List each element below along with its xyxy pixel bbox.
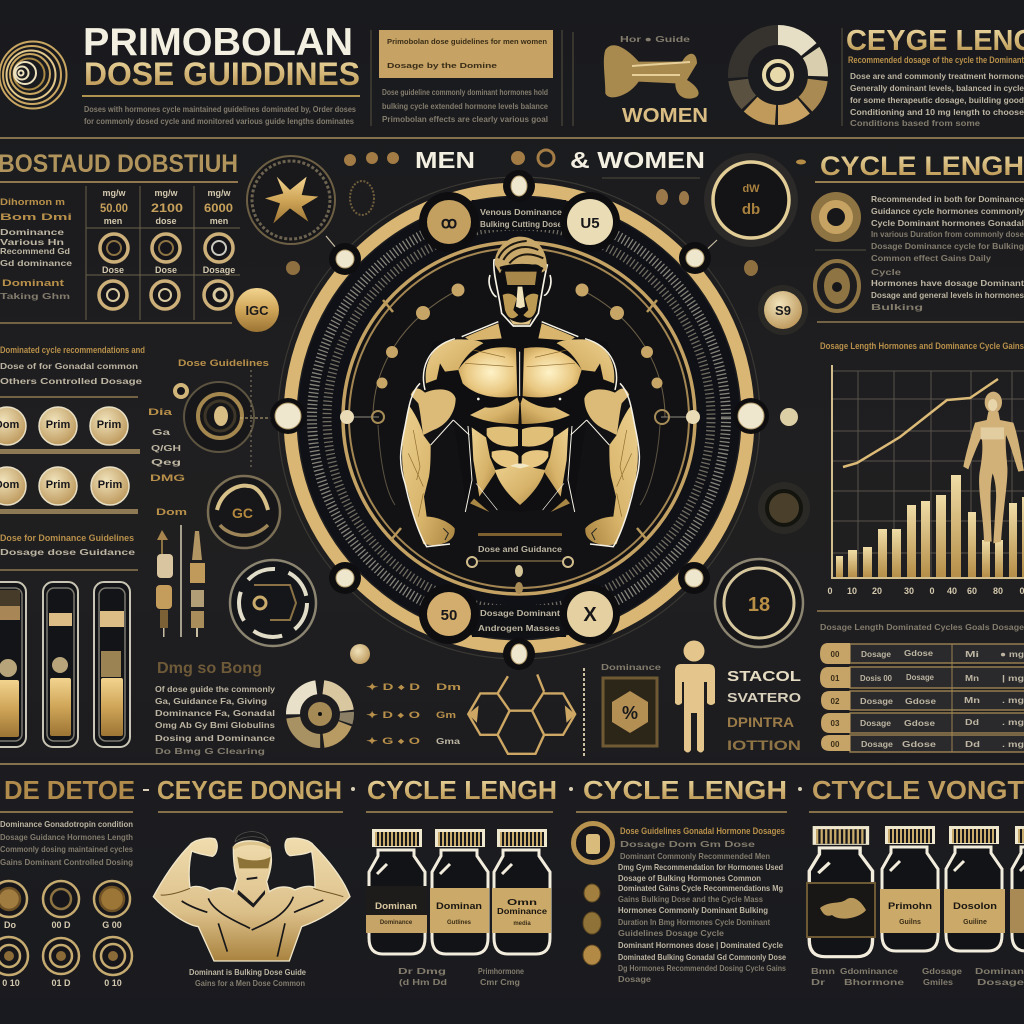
text block: cycle notes 1: Recommended in both for Dominance — [871, 194, 1024, 204]
figure: woman — [963, 392, 1024, 543]
heading 4: CYCLE LENGH — [583, 775, 787, 805]
table values: Dose — [102, 265, 124, 275]
table row labels: 00 — [831, 740, 840, 749]
text block: notes: Dosage — [618, 974, 651, 984]
icon: right dot — [780, 408, 798, 426]
pills row 1: Prim — [97, 419, 121, 431]
chart: bars and trend — [827, 365, 1024, 596]
bottle captions — [398, 966, 524, 987]
chart axis labels: 10 — [847, 586, 857, 596]
table values — [100, 188, 235, 275]
table row labels: 00 — [831, 650, 840, 659]
bottle captions: Dr Dmg — [398, 966, 446, 976]
text block: bottom left — [0, 819, 133, 867]
chart axis labels: 20 — [872, 586, 882, 596]
callout: gold box: Dosage by the Domine — [387, 61, 497, 70]
icon: bone shape with women label: WOMEN — [622, 105, 708, 127]
bottle captions: Dosage — [977, 977, 1024, 987]
chart axis labels: 40 — [947, 586, 957, 596]
subtitle text: for commonly dosed cycle and monitored various guide lengths dominates — [84, 116, 354, 126]
text block: mid-left column: Qeg — [151, 457, 181, 467]
table values: Dose — [155, 265, 177, 275]
text block: notes: Dosage Dom Gm Dose — [620, 839, 755, 849]
heading: dose duration: BOSTAUD DOBSTIUH — [0, 150, 238, 178]
label: men: MEN — [415, 147, 475, 173]
text block: dose notes: Ga, Guidance Fa, Giving — [155, 696, 267, 706]
table row text: . mg — [1002, 739, 1024, 749]
text block: dose notes — [155, 684, 275, 756]
text block: table intro: Recommend Gd — [0, 246, 70, 256]
table row text: ● mg — [1000, 649, 1024, 659]
outer gold ring — [290, 189, 748, 647]
header panel — [0, 21, 1024, 128]
text block: side label: STACOL — [727, 668, 801, 685]
text block: pills heading — [0, 345, 145, 386]
panel: lower middle icons — [293, 408, 810, 757]
chart axis labels: 0 — [827, 586, 833, 596]
bottle 1: Dominance — [380, 920, 413, 926]
icon: dosing pins — [156, 525, 205, 637]
text block: bottom left: Dosage Guidance Hormones Length — [0, 832, 133, 842]
table values: 2100 — [151, 201, 183, 215]
table: dose rows — [820, 643, 1024, 752]
band caption bottom: Androgen Masses — [478, 623, 560, 633]
icon: framed badge: Dominance — [601, 662, 661, 672]
bottle captions: Gdominance — [840, 966, 898, 976]
text block: mid-left heading: Dose Guidelines — [178, 358, 269, 368]
text block: side label: SVATERO — [727, 690, 801, 705]
text block: table intro: Gd dominance — [0, 258, 72, 268]
text block: cycle notes — [848, 55, 1024, 128]
icon labels: 0 10 — [104, 978, 122, 988]
pills row 1 — [0, 407, 128, 445]
text block: intro: Dose guideline commonly dominant hormones hold — [382, 87, 548, 97]
text block: dose notes: Dominance Fa, Gonadal — [155, 708, 275, 718]
icon: framed badge: % — [622, 703, 638, 723]
text block: mid-left column: Q/GH — [151, 443, 181, 453]
icon labels: 0 10 — [2, 978, 20, 988]
ring nodes: large numbered: ꝏ — [441, 215, 457, 232]
callout: gold box — [379, 30, 553, 78]
band caption bottom — [472, 605, 566, 637]
icon labels: Do — [4, 920, 16, 930]
heading separators — [143, 787, 802, 791]
inner gold rings — [343, 242, 695, 594]
table values: dose — [155, 216, 177, 226]
dashed divider — [583, 668, 585, 757]
title: PRIMOBOLAN — [83, 21, 353, 64]
heading 2: CEYGE DONGH — [157, 775, 342, 805]
concentric icons — [0, 881, 132, 975]
text block: mid-left column: Dom — [156, 507, 187, 517]
table row text: . mg — [1002, 695, 1024, 705]
icon: right small badge: S9 — [775, 303, 791, 318]
icon: small badge IGC — [235, 288, 279, 332]
icon: ring with hexagon — [230, 560, 316, 646]
icon: gold spiral — [0, 42, 66, 108]
table row text: Dosage — [906, 672, 934, 682]
text block: notes: Dg Hormones Recommended Dosing Cycle Gains — [618, 963, 786, 973]
text block: notes: Hormones Commonly Dominant Bulking — [618, 905, 768, 915]
table row text — [860, 648, 1024, 749]
icon: crest badge: db — [742, 201, 760, 218]
text block: notes: Dmg Gym Recommendation for Hormones Used — [618, 862, 783, 872]
text block: dose notes: Dosing and Dominance — [155, 733, 275, 743]
text block: bottom left: Gains Dominant Controlled Dosing — [0, 857, 133, 867]
text block: mid-left column: Dia — [148, 407, 174, 417]
pills row 2: Prim — [98, 479, 122, 491]
bottle captions: Gmiles — [923, 977, 953, 987]
bottle captions: Bmn — [811, 966, 835, 976]
text block: table intro: Dominance — [0, 227, 64, 237]
icon: gold ring — [811, 192, 861, 242]
label: and women: & WOMEN — [570, 147, 705, 173]
chart axis labels: 80 — [993, 586, 1003, 596]
panel: mid-left icons — [148, 358, 316, 756]
heading 5: CTYCLE VONGT — [812, 775, 1024, 805]
text block: dose notes: Do Bmg G Clearing — [155, 746, 265, 756]
table row text: Dosage — [861, 649, 891, 659]
text block: cycle notes 1: Common effect Gains Daily — [871, 253, 991, 263]
text block: notes: Dose Guidelines Gonadal Hormone Dosages — [620, 826, 785, 836]
hatched band — [298, 197, 740, 639]
table row text: . mg — [1002, 717, 1024, 727]
icon labels: G 00 — [102, 920, 122, 930]
bottle 3 — [492, 829, 551, 954]
text block: cycle notes 2: Hormones have dosage Dominant — [871, 278, 1024, 288]
text block: table intro: Various Hn — [0, 237, 64, 247]
table row text: Dosage — [860, 696, 893, 706]
table values: men — [104, 216, 122, 226]
table grid — [86, 186, 240, 320]
heading 1: DE DETOE — [4, 775, 135, 805]
panel: right cycle length — [796, 151, 1024, 752]
text block: cycle notes 1: Cycle Dominant hormones Gonadal — [871, 218, 1024, 228]
callout: gold box: Primobolan dose guidelines for men women — [387, 37, 547, 46]
vial 3 — [94, 582, 130, 747]
text block: glyph columns: ✦ D ♦ O — [366, 710, 420, 720]
bottle 6: Dosolon — [953, 901, 997, 911]
icon: right ring: 18 — [748, 594, 770, 616]
icon: star badge — [247, 156, 342, 255]
inner orbit with dots — [340, 284, 700, 505]
title — [82, 21, 360, 96]
heading: cycle length: CYCLE LENGH — [820, 151, 1024, 181]
table row text: | mg — [1002, 673, 1024, 683]
chart axis labels: 0 — [929, 586, 935, 596]
icon: small badge IGC: IGC — [245, 303, 269, 318]
table row text: Gdose — [904, 648, 933, 658]
bottle 5: Guilns — [899, 919, 921, 926]
chart trend line — [843, 379, 998, 467]
panel: left dose table — [0, 150, 240, 323]
heading 3: CYCLE LENGH — [367, 775, 557, 805]
heading: dose blurred: Dmg so Bong — [157, 660, 262, 677]
band caption top — [472, 200, 566, 230]
bottle 2: Gutlines — [447, 920, 472, 926]
text block: cycle notes: for some therapeutic dosage, building good — [850, 95, 1024, 105]
ring nodes: large numbered: 50 — [441, 607, 457, 624]
table rows — [850, 644, 1024, 752]
bottle 5 — [880, 826, 940, 951]
table row text: Gdose — [904, 718, 935, 728]
icon: target ring — [184, 370, 272, 470]
caption under figure: Dose and Guidance — [478, 544, 562, 554]
icon: right small ring — [758, 482, 810, 534]
text block: notes: Dominant Hormones dose | Dominated Cycle — [618, 940, 783, 950]
panel: bottom notes — [574, 824, 786, 984]
text block: pills heading: Others Controlled Dosage — [0, 376, 142, 386]
icon: small donut — [175, 385, 187, 397]
text block: mid-left column: DMG — [150, 473, 185, 483]
chart axis labels — [827, 586, 1024, 596]
icons: medallions — [583, 884, 601, 965]
text block: cycle notes 1: Dosage Dominance cycle for Bulking — [871, 241, 1024, 251]
bottle 3: Dominance — [497, 907, 548, 916]
ring nodes: large numbered: X — [583, 604, 597, 626]
section dividers — [0, 138, 1024, 764]
table row text: Mn — [964, 695, 980, 705]
table values: men — [210, 216, 228, 226]
text block: table intro: Dominant — [2, 278, 64, 288]
icon: ring with gold arcs: GC — [232, 505, 253, 521]
text block: side label: DPINTRA — [727, 714, 794, 730]
text block: notes: Dosage of Bulking Hormones Common — [618, 873, 761, 883]
bottle 7 — [1010, 826, 1024, 951]
bottle captions: Bhormone — [844, 977, 904, 987]
icon labels: 00 D — [51, 920, 71, 930]
text block: table heading: Dosage Length Dominated Cycles Goals Dosage — [820, 622, 1024, 632]
text block: notes: Duration In Bmg Hormones Cycle Dominant — [618, 917, 770, 927]
table row labels: 02 — [831, 697, 840, 706]
ring nodes: large numbered: U5 — [580, 215, 600, 232]
text block: notes — [618, 826, 786, 984]
bottle 2 — [430, 829, 489, 954]
subtitle text — [84, 104, 356, 126]
icon: bone shape with women label — [604, 34, 708, 127]
text block: cycle notes: Dose are and commonly treatment hormone — [850, 71, 1024, 81]
text block: table intro — [0, 197, 72, 301]
text block: mid-left column — [148, 407, 187, 517]
table row text: Mn — [965, 673, 979, 683]
icon labels: 01 D — [51, 978, 71, 988]
text block: under pills — [0, 533, 135, 557]
caption: flexing man — [189, 967, 306, 988]
emblem: top heading row — [235, 147, 808, 335]
vial 2 — [43, 582, 78, 747]
subtitle text: Doses with hormones cycle maintained guidelines dominated by, Order doses — [84, 104, 356, 114]
bottle captions: Dominan — [975, 966, 1024, 976]
band caption top: Venous Dominance — [480, 207, 562, 217]
text block: glyph columns: ✦ G ♦ O — [366, 736, 420, 746]
text block: notes: Guidelines Dosage Cycle — [618, 928, 724, 938]
table row labels: 01 — [831, 674, 840, 683]
table row text: Dd — [965, 739, 980, 749]
ring nodes: small — [270, 170, 769, 670]
chart axes — [832, 365, 1024, 578]
panel: left pills — [0, 345, 145, 570]
icon: small coin — [350, 644, 370, 664]
bottle captions: Primhormone — [478, 966, 524, 976]
text block: cycle notes 2: Bulking — [871, 302, 923, 312]
icon: oval badge — [815, 261, 859, 311]
table row text: Gdose — [905, 696, 936, 706]
table row labels: 03 — [831, 719, 840, 728]
vial 1 — [0, 582, 26, 747]
icon: framed badge — [601, 662, 661, 746]
text block: side label — [727, 668, 801, 753]
text block: glyph columns — [366, 682, 461, 746]
text block: cycle notes: Conditions based from some — [850, 118, 980, 128]
icon: right ring — [715, 559, 803, 647]
figure: muscular man — [401, 237, 639, 547]
bottle 5: Primohn — [888, 901, 932, 911]
bottles group right — [807, 826, 1024, 987]
bottle 1 — [366, 829, 427, 954]
text block: intro: bulking cycle extended hormone levels balance — [382, 101, 548, 111]
text block: side label: IOTTION — [727, 737, 801, 753]
chart grid — [832, 371, 1024, 578]
icon: gold ring with cylinder — [574, 824, 612, 862]
bottle captions: Dr — [811, 977, 826, 987]
icon: small hive — [350, 181, 374, 215]
table values: 6000 — [204, 201, 233, 215]
bottle 4 — [807, 826, 875, 957]
icon: marks beside crest — [656, 189, 689, 205]
chart axis labels: 30 — [904, 586, 914, 596]
dose icons row 2 — [99, 281, 232, 309]
chart bars — [836, 475, 1024, 577]
text block: glyph columns: Gma — [436, 736, 460, 746]
icon: tiny marks before men — [344, 152, 399, 166]
text block: notes: Dominated Gains Cycle Recommendations Mg — [618, 883, 783, 893]
text block: cycle notes 1: Guidance cycle hormones commonly — [871, 206, 1024, 216]
icon: crest badge: dW — [742, 183, 760, 195]
bottle captions: Gdosage — [922, 966, 962, 976]
band caption bottom: Dosage Dominant — [480, 608, 560, 618]
dose icons row 1 — [100, 234, 233, 262]
caption: flexing man: Dominant is Bulking Dose Guide — [189, 967, 306, 977]
icon: small dot left — [286, 261, 300, 275]
text block: mid-left column: Ga — [152, 427, 170, 437]
title: DOSE GUIDDINES — [84, 56, 360, 92]
icon: right small badge — [758, 285, 808, 335]
bottle 2: Dominan — [436, 901, 482, 911]
text block: under pills: Dose for Dominance Guidelines — [0, 533, 134, 543]
bottle 1: Dominan — [375, 901, 417, 911]
text block: dose notes: Of dose guide the commonly — [155, 684, 275, 694]
text block: dose notes: Omg Ab Gy Bmi Globulins — [155, 720, 275, 730]
table row text: Dosage — [860, 718, 891, 728]
caption: flexing man: Gains for a Men Dose Common — [195, 978, 305, 988]
table values: mg/w — [207, 188, 231, 198]
ring nodes: large numbered — [419, 192, 620, 644]
figure: flexing man — [153, 832, 350, 961]
bottle captions: (d Hm Dd — [399, 977, 447, 987]
text block: cycle notes: Conditioning and 10 mg length to choose — [850, 107, 1024, 117]
icon labels — [2, 920, 122, 988]
icon: ring with gold arcs — [208, 476, 280, 548]
text block: under pills: Dosage dose Guidance — [0, 547, 135, 557]
pills row 2: Prim — [46, 479, 70, 491]
bottle 3: media — [513, 921, 531, 927]
table row text: Dosis 00 — [860, 673, 892, 683]
bottom headings — [0, 775, 1024, 812]
icon: bone shape with women label: Hor ● Guide — [620, 34, 690, 44]
text block: table intro: Taking Ghm — [0, 291, 71, 301]
text block: table intro: Bom Dmi — [0, 212, 72, 222]
text block: notes: Gains Bulking Dose and the Cycle Mass — [618, 894, 763, 904]
figure head — [489, 237, 551, 326]
text block: glyph columns: Dm — [436, 682, 461, 692]
table row text: Dd — [965, 717, 979, 727]
text block: cycle notes 2: Cycle — [871, 267, 901, 277]
text block: cycle notes 2 — [871, 267, 1024, 312]
caption under figure — [467, 533, 573, 594]
text block: bottom left: Dominance Gonadotropin condition — [0, 819, 133, 829]
pills row 2 — [0, 467, 129, 505]
table values: 50.00 — [100, 201, 128, 215]
bottle captions — [811, 966, 1024, 987]
text block: intro: Primobolan effects are clearly various goal — [382, 114, 548, 124]
bottle captions: Cmr Cmg — [480, 977, 520, 987]
text block: pills heading: Dose of for Gonadal common — [0, 361, 138, 371]
icon: segmented donut small — [293, 687, 347, 741]
table values: mg/w — [154, 188, 178, 198]
icon: hexagons — [468, 674, 575, 754]
text block: glyph columns: ✦ D ♦ D — [366, 682, 421, 692]
icon: segmented donut — [738, 35, 818, 115]
bottle 3: Omn — [507, 898, 537, 907]
pills row 1: Prim — [46, 419, 70, 431]
panel: bottom left icons — [0, 819, 133, 988]
table values: mg/w — [102, 188, 126, 198]
text block: glyph columns: Gm — [436, 710, 456, 720]
bottle 6 — [944, 826, 1005, 951]
icon: crest badge — [700, 153, 798, 256]
band caption top: Bulking Cutting Dose — [480, 219, 562, 229]
bottle 6: Guiline — [963, 919, 987, 926]
table row tabs — [820, 643, 850, 751]
text block: pills heading: Dominated cycle recommendations and — [0, 345, 145, 355]
table row text: Mi — [965, 649, 979, 659]
text block: table intro: Dihormon m — [0, 197, 65, 207]
text block: intro — [382, 87, 548, 124]
text block: cycle notes 1 — [871, 194, 1024, 263]
heading rules — [0, 811, 1024, 813]
table row text: Dosage — [861, 739, 893, 749]
panel: vials — [0, 582, 130, 747]
icon: small dot right — [744, 260, 758, 276]
table row labels — [831, 650, 840, 749]
text block: bottom left: Commonly dosing maintained cycles — [0, 844, 133, 854]
table values: Dosage — [203, 265, 235, 275]
table row text: Gdose — [902, 739, 936, 749]
bottles group left — [366, 829, 551, 987]
text block: notes: Dominant Commonly Recommended Men — [620, 851, 770, 861]
icon: tiny marks before women — [511, 150, 554, 166]
chart axis labels: 60 — [967, 586, 977, 596]
text block: notes: Dominated Bulking Gonadal Gd Commonly Dose — [618, 952, 786, 962]
dot — [796, 160, 806, 164]
central circular diagram — [270, 170, 769, 670]
figure body — [401, 322, 639, 547]
icon: person figure — [675, 640, 715, 752]
